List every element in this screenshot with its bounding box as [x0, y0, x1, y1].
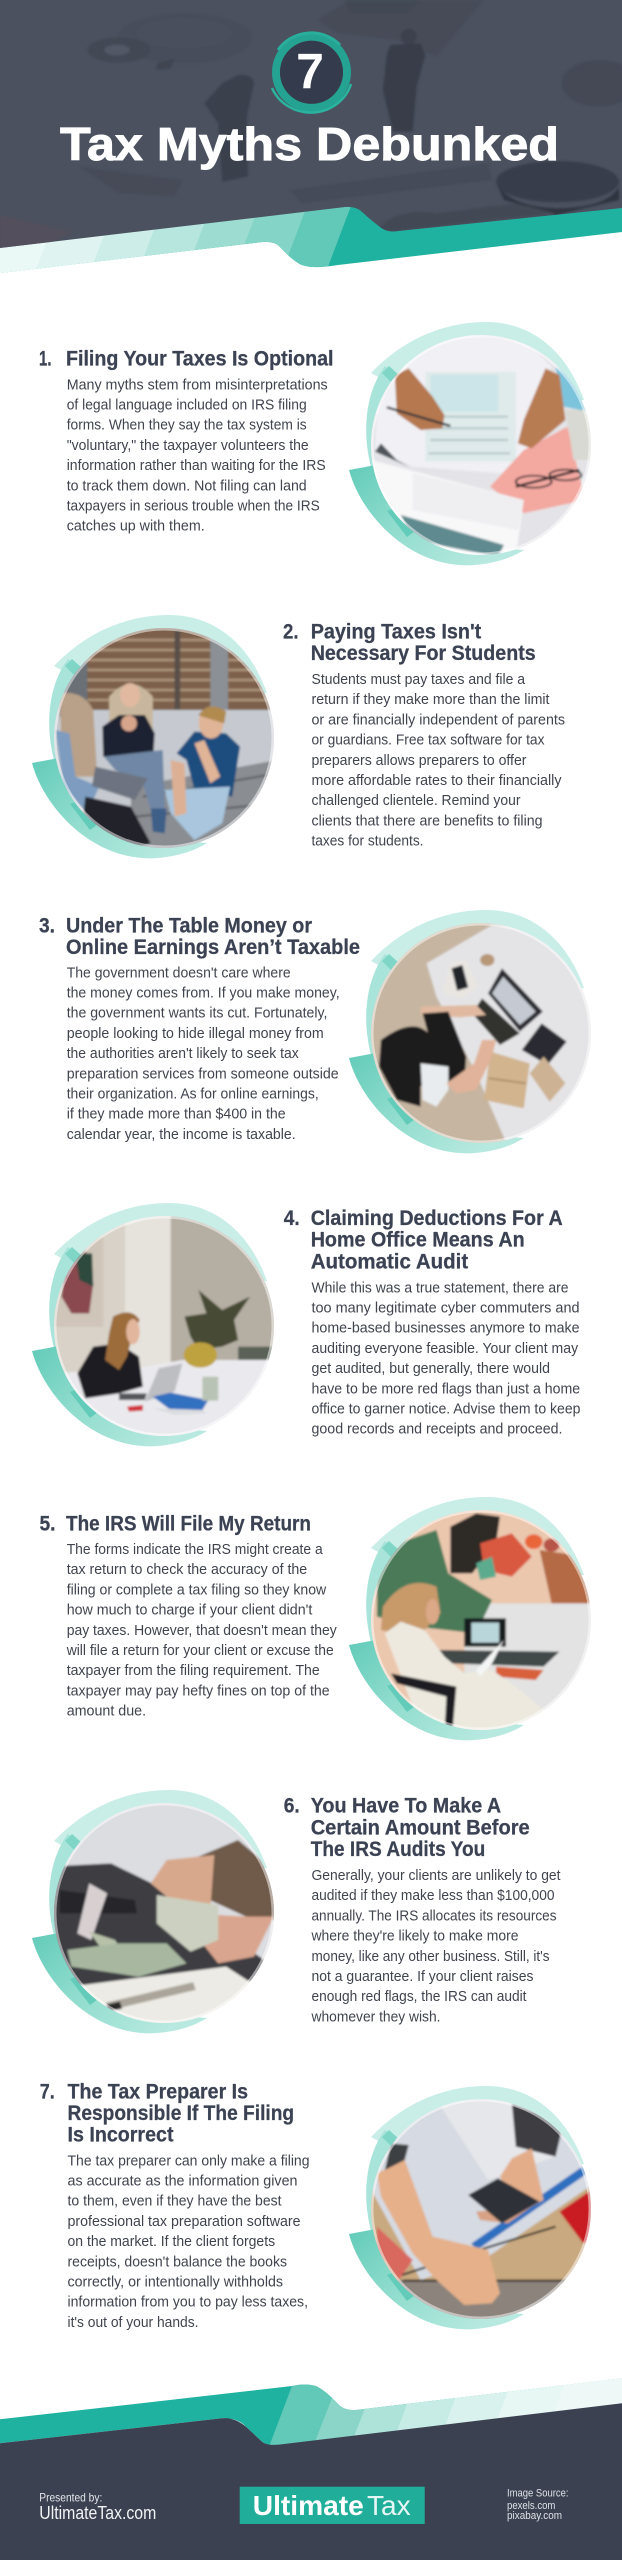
decorative rings 3 — [349, 910, 584, 1153]
body text 5: pay taxes. However, that doesn't mean they — [67, 1623, 337, 1639]
decorative rings 2 — [32, 615, 267, 858]
body text 4: office to garner notice. Advise them to keep — [312, 1402, 580, 1418]
body text 2: clients that there are benefits to filing — [312, 813, 542, 829]
body text 3: calendar year, the income is taxable. — [67, 1127, 296, 1143]
body text 6: annually. The IRS allocates its resources — [312, 1908, 556, 1924]
presented by: Presented by: — [39, 2491, 102, 2505]
body text 1: to track them down. Not filing can land — [67, 478, 307, 494]
heading 4: Automatic Audit — [311, 1250, 468, 1273]
heading 5: 5. — [40, 1513, 56, 1536]
body text 7: it's out of your hands. — [68, 2315, 198, 2331]
heading 4: Claiming Deductions For A — [311, 1207, 563, 1230]
heading 7: 7. — [40, 2080, 55, 2103]
body text 5: amount due. — [67, 1704, 146, 1720]
body text 1: taxpayers in serious trouble when the IRS — [67, 498, 320, 514]
decorative rings 4 — [32, 1203, 267, 1446]
image source: pixabay.com — [507, 2510, 562, 2522]
heading 6 — [284, 1795, 530, 1861]
body text 2 — [312, 672, 565, 850]
photo: woman at desk in home office — [54, 1216, 274, 1436]
body text 7: professional tax preparation software — [68, 2214, 300, 2230]
body text 2: preparers allows preparers to offer — [312, 753, 527, 769]
body text 5: how much to charge if your client didn't — [67, 1603, 312, 1619]
badge numeral: 7 — [296, 44, 324, 100]
heading 4: 4. — [284, 1207, 300, 1230]
body text 6 — [311, 1868, 560, 2025]
photo: three students on steps — [54, 628, 274, 848]
heading 7: The Tax Preparer Is — [68, 2080, 248, 2103]
body text 7: The tax preparer can only make a filing — [68, 2153, 310, 2169]
body text 5: filing or complete a tax filing so they know — [67, 1582, 327, 1598]
heading 2: Paying Taxes Isn't — [311, 620, 481, 643]
body text 4: get audited, but generally, there would — [312, 1361, 550, 1377]
teal ribbon under the header — [0, 206, 622, 273]
body text 2: Students must pay taxes and file a — [312, 672, 525, 688]
heading 5: The IRS Will File My Return — [66, 1513, 311, 1536]
heading 2: 2. — [283, 620, 298, 643]
decorative rings 7 — [349, 2086, 584, 2329]
faint photo texture — [0, 0, 622, 248]
photo: hands counting dollar bills — [54, 1803, 274, 2023]
heading 7: Is Incorrect — [68, 2124, 174, 2147]
presented by — [39, 2491, 156, 2523]
body text 4: have to be more red flags than just a home — [312, 1381, 580, 1397]
body text 4: good records and receipts and proceed. — [312, 1422, 562, 1438]
dark header photo background — [0, 0, 622, 248]
heading 4 — [284, 1207, 563, 1273]
photo: hands on calculator and paperwork — [371, 2099, 591, 2319]
body text 5: The forms indicate the IRS might create a — [67, 1542, 323, 1558]
body text 5 — [66, 1542, 337, 1720]
body text 3: The government doesn't care where — [67, 965, 291, 981]
footer dark background — [0, 2403, 622, 2560]
panel: myth 5 — [40, 1497, 603, 1740]
body text 2: or are financially independent of parents — [312, 712, 565, 728]
body text 2: return if they make more than the limit — [312, 692, 550, 708]
body text 6: Generally, your clients are unlikely to get — [312, 1868, 560, 1884]
heading 2: Necessary For Students — [311, 642, 536, 665]
heading 1: 1. — [39, 348, 52, 371]
heading 4: Home Office Means An — [311, 1229, 525, 1252]
body text 3: the money comes from. If you make money, — [67, 986, 340, 1002]
body text 4: too many legitimate cyber commuters and — [312, 1300, 580, 1316]
body text 7: as accurate as the information given — [68, 2174, 298, 2190]
body text 6: where they're likely to make more — [311, 1929, 518, 1945]
body text 6: enough red flags, the IRS can audit — [312, 1989, 526, 2005]
body text 3: their organization. As for online earnings, — [67, 1086, 319, 1102]
logo: Tax — [367, 2490, 411, 2521]
body text 3 — [67, 965, 340, 1143]
body text 2: taxes for students. — [312, 834, 424, 850]
body text 1: of legal language included on IRS filing — [67, 398, 307, 414]
body text 3: preparation services from someone outside — [67, 1066, 339, 1082]
body text 7: information from you to pay less taxes, — [68, 2295, 308, 2311]
panel: myth 4 — [32, 1203, 580, 1447]
photo: woman working on laptop from above — [371, 923, 591, 1143]
body text 2: challenged clientele. Remind your — [312, 793, 521, 809]
heading 7 — [40, 2080, 294, 2147]
body text 5: taxpayer from the filing requirement. The — [67, 1663, 320, 1679]
footer — [0, 2370, 622, 2560]
logo — [240, 2487, 425, 2524]
body text 5: will file a return for your client or excuse the — [66, 1643, 334, 1659]
title: Tax Myths Debunked — [60, 118, 559, 170]
image source: Image Source: — [507, 2488, 568, 2500]
body text 7: correctly, or intentionally withholds — [68, 2274, 283, 2290]
body text 4 — [312, 1280, 580, 1438]
panel: myth 7 — [40, 2080, 603, 2331]
heading 6: 6. — [284, 1795, 300, 1818]
photo: hands filling a tax form — [371, 335, 591, 555]
presented by: UltimateTax.com — [39, 2503, 156, 2523]
heading 6: The IRS Audits You — [311, 1838, 485, 1861]
body text 4: auditing everyone feasible. Your client may — [312, 1341, 579, 1357]
body text 4: While this was a true statement, there are — [312, 1280, 568, 1296]
panel: myth 6 — [32, 1790, 560, 2033]
body text 6: not a guarantee. If your client raises — [312, 1969, 534, 1985]
body text 6: money, like any other business. Still, it's — [312, 1949, 550, 1965]
body text 1: "voluntary," the taxpayer volunteers the — [67, 438, 309, 454]
icon: number badge — [272, 33, 351, 113]
body text 1: catches up with them. — [67, 519, 205, 535]
body text 7 — [68, 2153, 310, 2331]
body text 1: forms. When they say the tax system is — [67, 418, 307, 434]
photo: worried woman reading a document — [371, 1510, 591, 1730]
heading 7: Responsible If The Filing — [68, 2102, 294, 2125]
heading 2 — [283, 620, 536, 665]
body text 1: Many myths stem from misinterpretations — [67, 377, 328, 393]
heading 3: Under The Table Money or — [66, 914, 312, 937]
panel: myth 1 — [39, 322, 603, 565]
body text 3: the government wants its cut. Fortunately, — [67, 1006, 327, 1022]
footer teal ribbon — [0, 2378, 622, 2445]
body text 1 — [67, 377, 328, 535]
decorative rings 1 — [349, 322, 584, 565]
body text 5: taxpayer may pay hefty fines on top of the — [67, 1683, 330, 1699]
body text 6: whomever they wish. — [311, 2009, 440, 2025]
logo: Ultimate — [253, 2490, 364, 2521]
heading 3 — [39, 914, 360, 959]
decorative rings 5 — [349, 1497, 584, 1740]
heading 3: Online Earnings Aren’t Taxable — [66, 936, 360, 959]
image source: pexels.com — [507, 2500, 555, 2512]
heading 6: You Have To Make A — [311, 1795, 501, 1818]
panel: myth 2 — [32, 615, 565, 858]
heading 1: Filing Your Taxes Is Optional — [66, 348, 334, 371]
body text 2: or guardians. Free tax software for tax — [312, 733, 545, 749]
body text 3: if they made more than $400 in the — [67, 1107, 286, 1123]
heading 6: Certain Amount Before — [311, 1816, 530, 1839]
body text 6: audited if they make less than $100,000 — [312, 1888, 554, 1904]
body text 4: home-based businesses anymore to make — [312, 1321, 580, 1337]
header banner — [0, 0, 622, 280]
panel: myth 3 — [39, 910, 603, 1153]
body text 2: more affordable rates to their financially — [312, 773, 562, 789]
body text 7: receipts, doesn't balance the books — [68, 2254, 287, 2270]
body text 1: information rather than waiting for the IRS — [67, 458, 326, 474]
body text 5: tax return to check the accuracy of the — [67, 1562, 307, 1578]
body text 7: to them, even if they have the best — [68, 2194, 282, 2210]
body text 7: on the market. If the client forgets — [68, 2234, 275, 2250]
image source — [507, 2488, 568, 2522]
heading 3: 3. — [39, 914, 55, 937]
decorative rings 6 — [32, 1790, 267, 2033]
body text 3: the authorities aren't likely to seek tax — [67, 1046, 299, 1062]
body text 3: people looking to hide illegal money from — [67, 1026, 324, 1042]
